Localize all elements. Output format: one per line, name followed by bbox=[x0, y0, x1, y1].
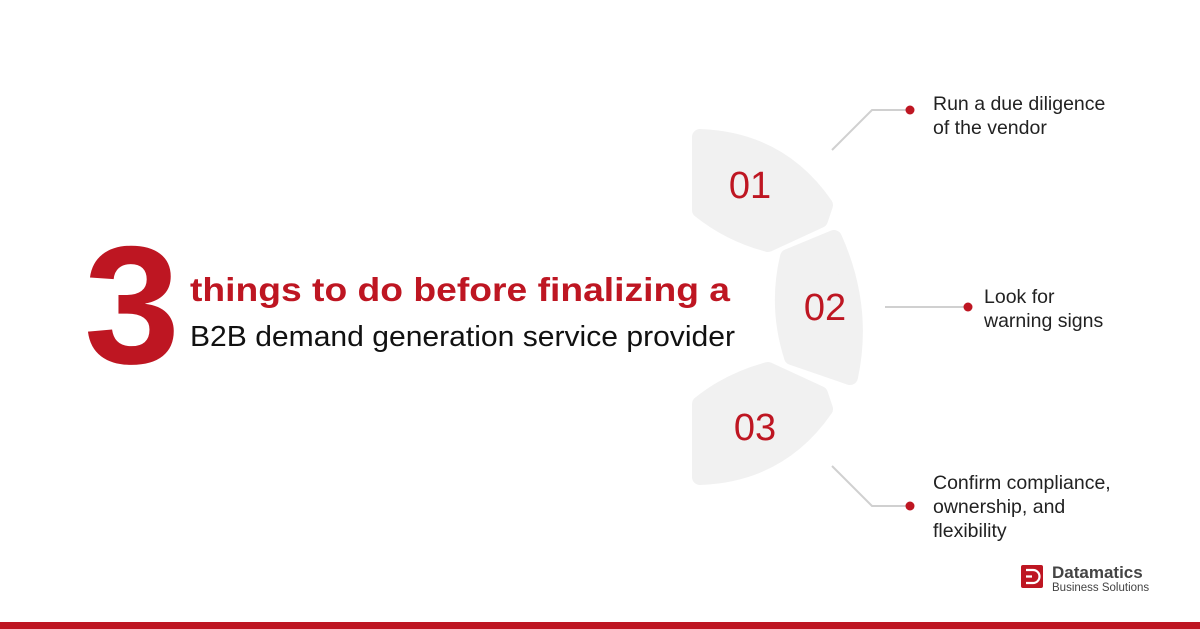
big number 3: 3 bbox=[84, 211, 180, 399]
text 03: flexibility bbox=[933, 520, 1007, 542]
text 03: Confirm compliance, bbox=[933, 472, 1111, 494]
text 01: Run a due diligence bbox=[933, 93, 1105, 115]
connector 02 bbox=[885, 302, 972, 312]
logo: Datamatics bbox=[1052, 563, 1143, 582]
text 02: Look for bbox=[984, 286, 1054, 308]
segment 03 bbox=[700, 370, 825, 477]
segment 02: 02 bbox=[804, 287, 846, 329]
segment 02 bbox=[783, 238, 855, 377]
segment 01: 01 bbox=[729, 165, 771, 207]
bottom bar bbox=[0, 622, 1200, 629]
connector 03 bbox=[832, 466, 914, 510]
segment 03: 03 bbox=[734, 407, 776, 449]
title line 1: things to do before finalizing a bbox=[190, 271, 731, 308]
segment 01 bbox=[700, 137, 825, 244]
text 03: ownership, and bbox=[933, 496, 1065, 518]
logo: Business Solutions bbox=[1052, 582, 1149, 594]
text 02: warning signs bbox=[983, 310, 1103, 332]
text 01: of the vendor bbox=[933, 117, 1047, 139]
connector 01 bbox=[832, 106, 914, 150]
logo bbox=[1021, 563, 1149, 594]
title line 2: B2B demand generation service provider bbox=[190, 321, 735, 353]
